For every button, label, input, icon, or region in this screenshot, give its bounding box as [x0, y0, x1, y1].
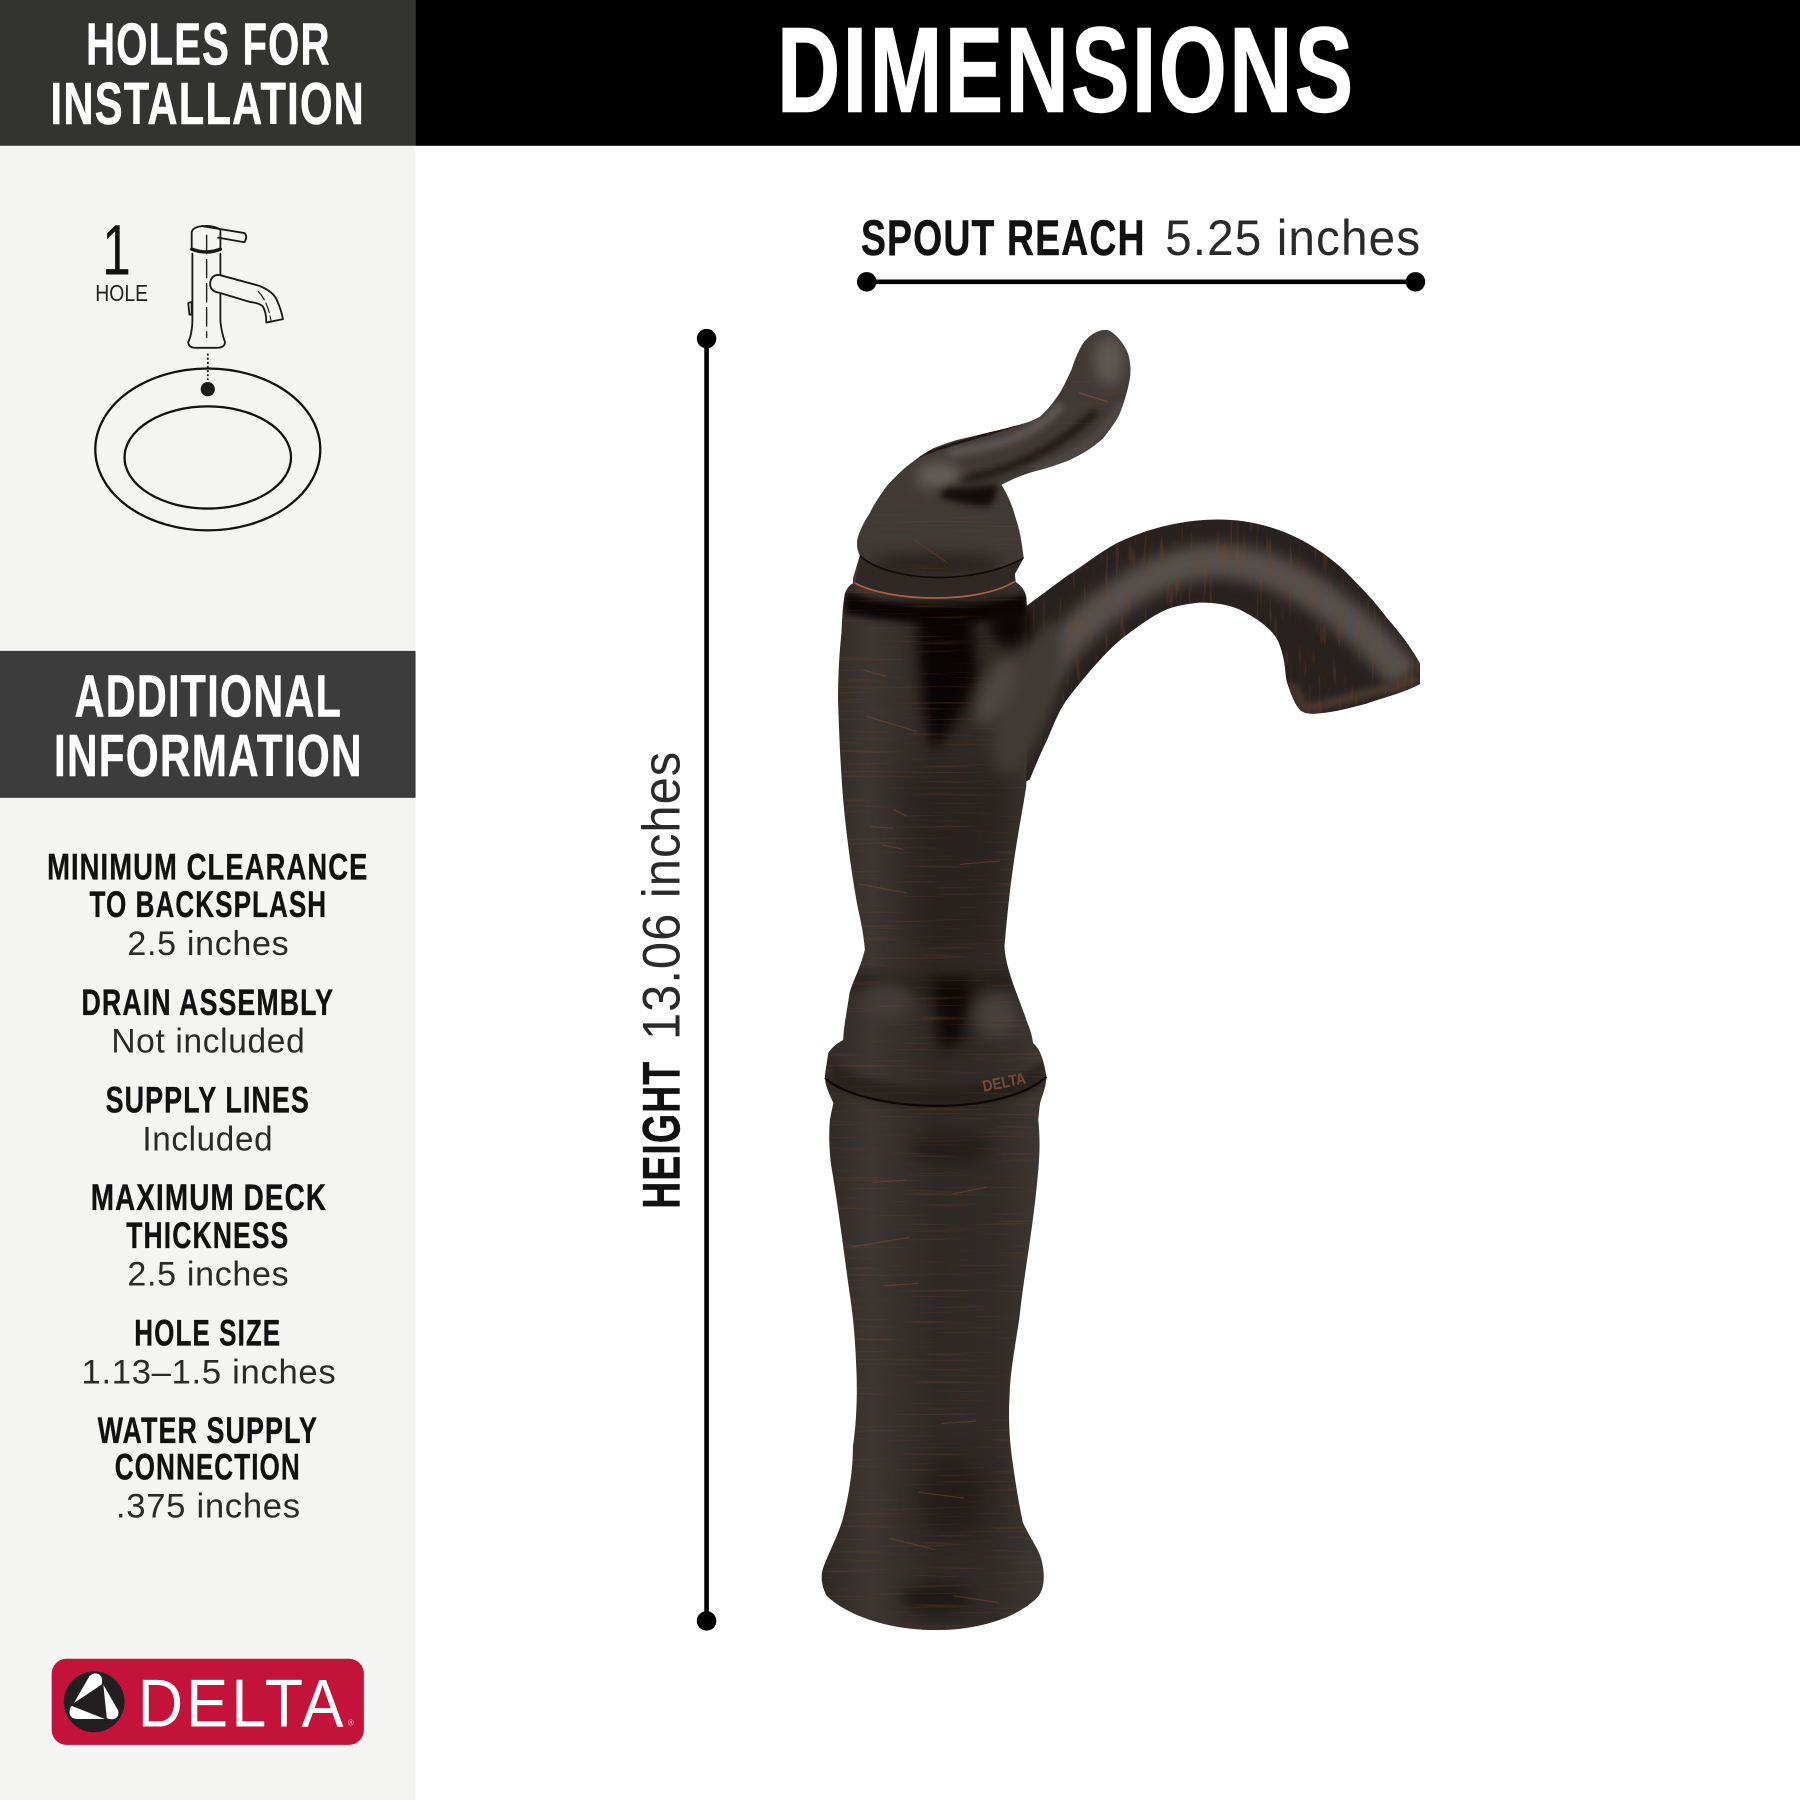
spec: drain assembly: Not included — [111, 1023, 305, 1061]
spec: maximum deck thickness: MAXIMUM DECK — [91, 1177, 327, 1218]
spec: water supply connection: CONNECTION — [115, 1447, 301, 1488]
label: 1 hole: HOLE — [95, 280, 148, 306]
spec: water supply connection — [98, 1410, 318, 1526]
faucet spout — [1026, 520, 1420, 782]
faucet collar seam — [825, 1077, 1046, 1106]
spec: supply lines: Included — [142, 1120, 273, 1158]
title: DIMENSIONS — [777, 2, 1356, 137]
icon: dotted guide line — [207, 354, 209, 380]
logo: delta: DELTA — [138, 1667, 347, 1742]
spec: hole size — [82, 1312, 336, 1391]
logo: delta — [52, 1659, 364, 1745]
icon: sink with one hole — [95, 368, 320, 530]
faucet engraved DELTA mark: DELTA — [981, 1070, 1028, 1096]
heading: holes for installation — [0, 0, 416, 146]
faucet spout-to-body blend — [972, 606, 1064, 772]
panel: dimensions header — [416, 0, 1800, 146]
heading: holes for installation: INSTALLATION — [51, 70, 365, 137]
spec: supply lines: SUPPLY LINES — [106, 1079, 310, 1120]
faucet handle — [853, 330, 1130, 597]
spec: maximum deck thickness: THICKNESS — [126, 1215, 289, 1256]
spec: minimum clearance: 2.5 inches — [127, 925, 289, 963]
dimension: spout reach — [857, 209, 1425, 292]
dimension: height — [633, 329, 716, 1631]
spec: minimum clearance: TO BACKSPLASH — [90, 884, 327, 925]
heading: additional information: ADDITIONAL — [75, 662, 342, 729]
icon: faucet line drawing — [188, 226, 283, 348]
logo: delta: ® — [348, 1718, 354, 1727]
spec: minimum clearance — [47, 846, 368, 963]
spec: minimum clearance: MINIMUM CLEARANCE — [47, 846, 368, 887]
spec: hole size: 1.13–1.5 inches — [82, 1353, 336, 1391]
dimension: height: HEIGHT — [633, 1061, 692, 1209]
panel: left sidebar — [0, 0, 416, 1800]
spec: drain assembly: DRAIN ASSEMBLY — [82, 982, 334, 1023]
dimension: spout reach: 5.25 inches — [1165, 209, 1421, 266]
faucet body — [822, 582, 1046, 1630]
dimension: spout reach: SPOUT REACH — [861, 209, 1146, 266]
faucet copper ring — [855, 582, 1015, 598]
heading: additional information: INFORMATION — [54, 722, 363, 789]
spec: water supply connection: .375 inches — [116, 1488, 301, 1526]
spec: maximum deck thickness — [91, 1177, 327, 1294]
spec: water supply connection: WATER SUPPLY — [98, 1410, 318, 1451]
product: oil-rubbed bronze faucet — [804, 321, 1435, 1642]
heading: holes for installation: HOLES FOR — [86, 10, 331, 77]
spec: drain assembly — [82, 982, 334, 1061]
label: 1 hole — [95, 211, 148, 306]
dimension: height: 13.06 inches — [633, 751, 692, 1040]
heading: additional information — [0, 651, 416, 798]
spec: hole size: HOLE SIZE — [134, 1312, 281, 1353]
label: 1 hole: 1 — [102, 211, 131, 290]
spec: maximum deck thickness: 2.5 inches — [127, 1256, 289, 1294]
spec: supply lines — [106, 1079, 310, 1158]
